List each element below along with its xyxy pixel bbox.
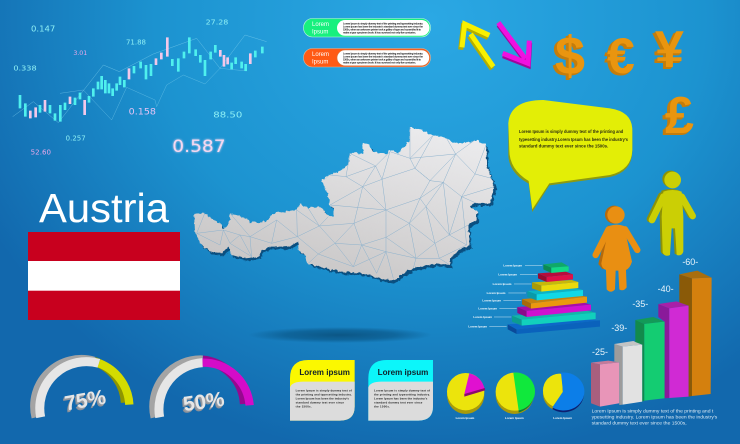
legend pill: orange: Ipsum	[312, 60, 328, 66]
bar chart: -25-	[592, 347, 608, 357]
pie chart 1: Lorem Ipsum	[456, 416, 475, 420]
info card: yellow: the 1500s.	[296, 404, 312, 408]
legend pill: orange: Lorem	[312, 52, 329, 58]
legend pill: green: make a type specimen book. It has survived not only five centuries.	[343, 30, 416, 34]
pie chart 1	[447, 373, 485, 420]
gauge 50 percent: 50%	[182, 388, 226, 416]
legend pill: orange: make a type specimen book. It has survived not only five centuries.	[343, 60, 416, 64]
female figure	[596, 206, 637, 292]
Austria map	[194, 127, 496, 283]
chart numbers: 0.587	[172, 137, 226, 156]
pyramid chart: Lorem Ipsum	[482, 298, 501, 302]
icon: euro: €	[607, 28, 635, 84]
info card: yellow: Lorem ipsum	[299, 368, 350, 377]
pie chart 2: Lorem Ipsum	[505, 416, 524, 420]
legend pill: green	[304, 18, 430, 37]
map shadow ellipse	[248, 327, 432, 343]
bar chart: -60-	[682, 257, 698, 267]
bar chart caption: ypesetting industry. Lorem Ipsum has been the industry's	[592, 415, 718, 420]
pyramid chart: Lorem Ipsum	[478, 307, 497, 311]
chart numbers: 27.28	[206, 18, 228, 26]
Austria flag	[28, 232, 180, 320]
legend pill: orange: 1500s, when an unknown printer took a galley of type and scrambled it to	[343, 58, 421, 62]
gauge 50 percent	[154, 360, 250, 418]
info card: yellow	[290, 360, 355, 421]
info card: cyan: the printing and typesetting industry.	[374, 392, 430, 396]
info card: yellow: Lorem Ipsum is simply dummy text of	[296, 389, 352, 393]
pie chart 3: Lorem Ipsum	[553, 416, 572, 420]
arrow: yellow	[461, 24, 493, 69]
pyramid chart: Lorem Ipsum	[468, 325, 487, 329]
chart numbers: 0.338	[13, 64, 37, 72]
info card: yellow: the printing and typesetting industry.	[296, 392, 352, 396]
legend pill: green: Lorem Ipsum has been the industry's standard dummy text ever since the	[343, 24, 424, 28]
icon: dollar: $	[555, 26, 585, 86]
gauge 75 percent: 75%	[62, 387, 107, 417]
legend pill: green: Lorem Ipsum is simply dummy text of the printing and typesetting industry.	[343, 22, 423, 26]
info card: yellow: Lorem Ipsum has been the industry's	[296, 396, 349, 400]
legend pill: green: 1500s, when an unknown printer took a galley of type and scrambled it to	[343, 28, 421, 32]
chart numbers	[13, 18, 242, 157]
bar chart: -40-	[658, 284, 674, 294]
legend pill: orange: Lorem Ipsum is simply dummy text of the printing and typesetting industry.	[343, 52, 423, 56]
pyramid chart	[468, 262, 600, 334]
info card: cyan: Lorem Ipsum has been the industry's	[374, 396, 428, 400]
arrow: magenta	[498, 23, 530, 66]
bar chart	[591, 257, 712, 407]
bubble callout	[508, 100, 632, 212]
bar chart: -39-	[611, 323, 627, 333]
bar chart caption: standard dummy text ever since the 1500s,	[592, 421, 687, 426]
bar chart: -35-	[632, 299, 648, 309]
gauge 75 percent: 75%	[63, 386, 108, 415]
bubble callout: Lorem Ipsum is simply dummy text of the printing and	[519, 129, 623, 135]
info card: cyan: standard dummy text ever since	[374, 400, 423, 404]
gauge 75 percent: 75%	[61, 388, 106, 418]
pie chart 2	[496, 372, 535, 420]
pyramid chart: Lorem Ipsum	[498, 272, 517, 276]
candlestick chart	[13, 35, 267, 123]
gauge 50 percent: 50%	[180, 390, 224, 418]
legend pill: orange	[304, 48, 430, 67]
bubble callout: standard dummy text ever since the 1500s.	[519, 143, 609, 149]
info card: cyan: Lorem ipsum	[378, 368, 428, 377]
male figure	[650, 171, 693, 256]
bubble callout: typesetting industry.Lorem Ipsum has been the industry's	[519, 137, 628, 143]
bar chart caption	[592, 408, 718, 426]
pie chart 3	[543, 372, 584, 420]
info card: cyan: the 1500s.	[374, 404, 390, 408]
chart numbers: 3.01	[73, 50, 87, 57]
info card: cyan: Lorem Ipsum is simply dummy text of	[374, 389, 430, 393]
pyramid chart: Lorem Ipsum	[473, 315, 492, 319]
info card: yellow: standard dummy text ever since	[296, 400, 344, 404]
chart numbers: 0.158	[129, 108, 156, 118]
chart numbers: 88.50	[213, 109, 242, 119]
legend pill: green: Ipsum	[312, 30, 328, 36]
icon: yen: ¥	[655, 21, 684, 79]
info card: cyan	[368, 360, 433, 421]
chart numbers: 0.147	[31, 24, 55, 34]
legend pill: orange: Lorem Ipsum has been the industry's standard dummy text ever since the	[343, 54, 424, 58]
pyramid chart: Lorem Ipsum	[503, 263, 522, 267]
chart numbers: 71.88	[126, 38, 146, 46]
chart numbers: 0.257	[66, 135, 86, 143]
pyramid chart: Lorem Ipsum	[487, 291, 506, 295]
gauge 75 percent	[35, 359, 129, 418]
icon: pound: £	[665, 87, 694, 145]
legend pill: green: Lorem	[312, 22, 329, 28]
pyramid chart: Lorem Ipsum	[493, 282, 512, 286]
bar chart caption: Lorem Ipsum is simply dummy text of the printing and t	[592, 408, 714, 413]
gauge 50 percent: 50%	[181, 389, 225, 417]
chart numbers: 52.60	[31, 149, 51, 157]
country title: Austria	[39, 185, 169, 231]
